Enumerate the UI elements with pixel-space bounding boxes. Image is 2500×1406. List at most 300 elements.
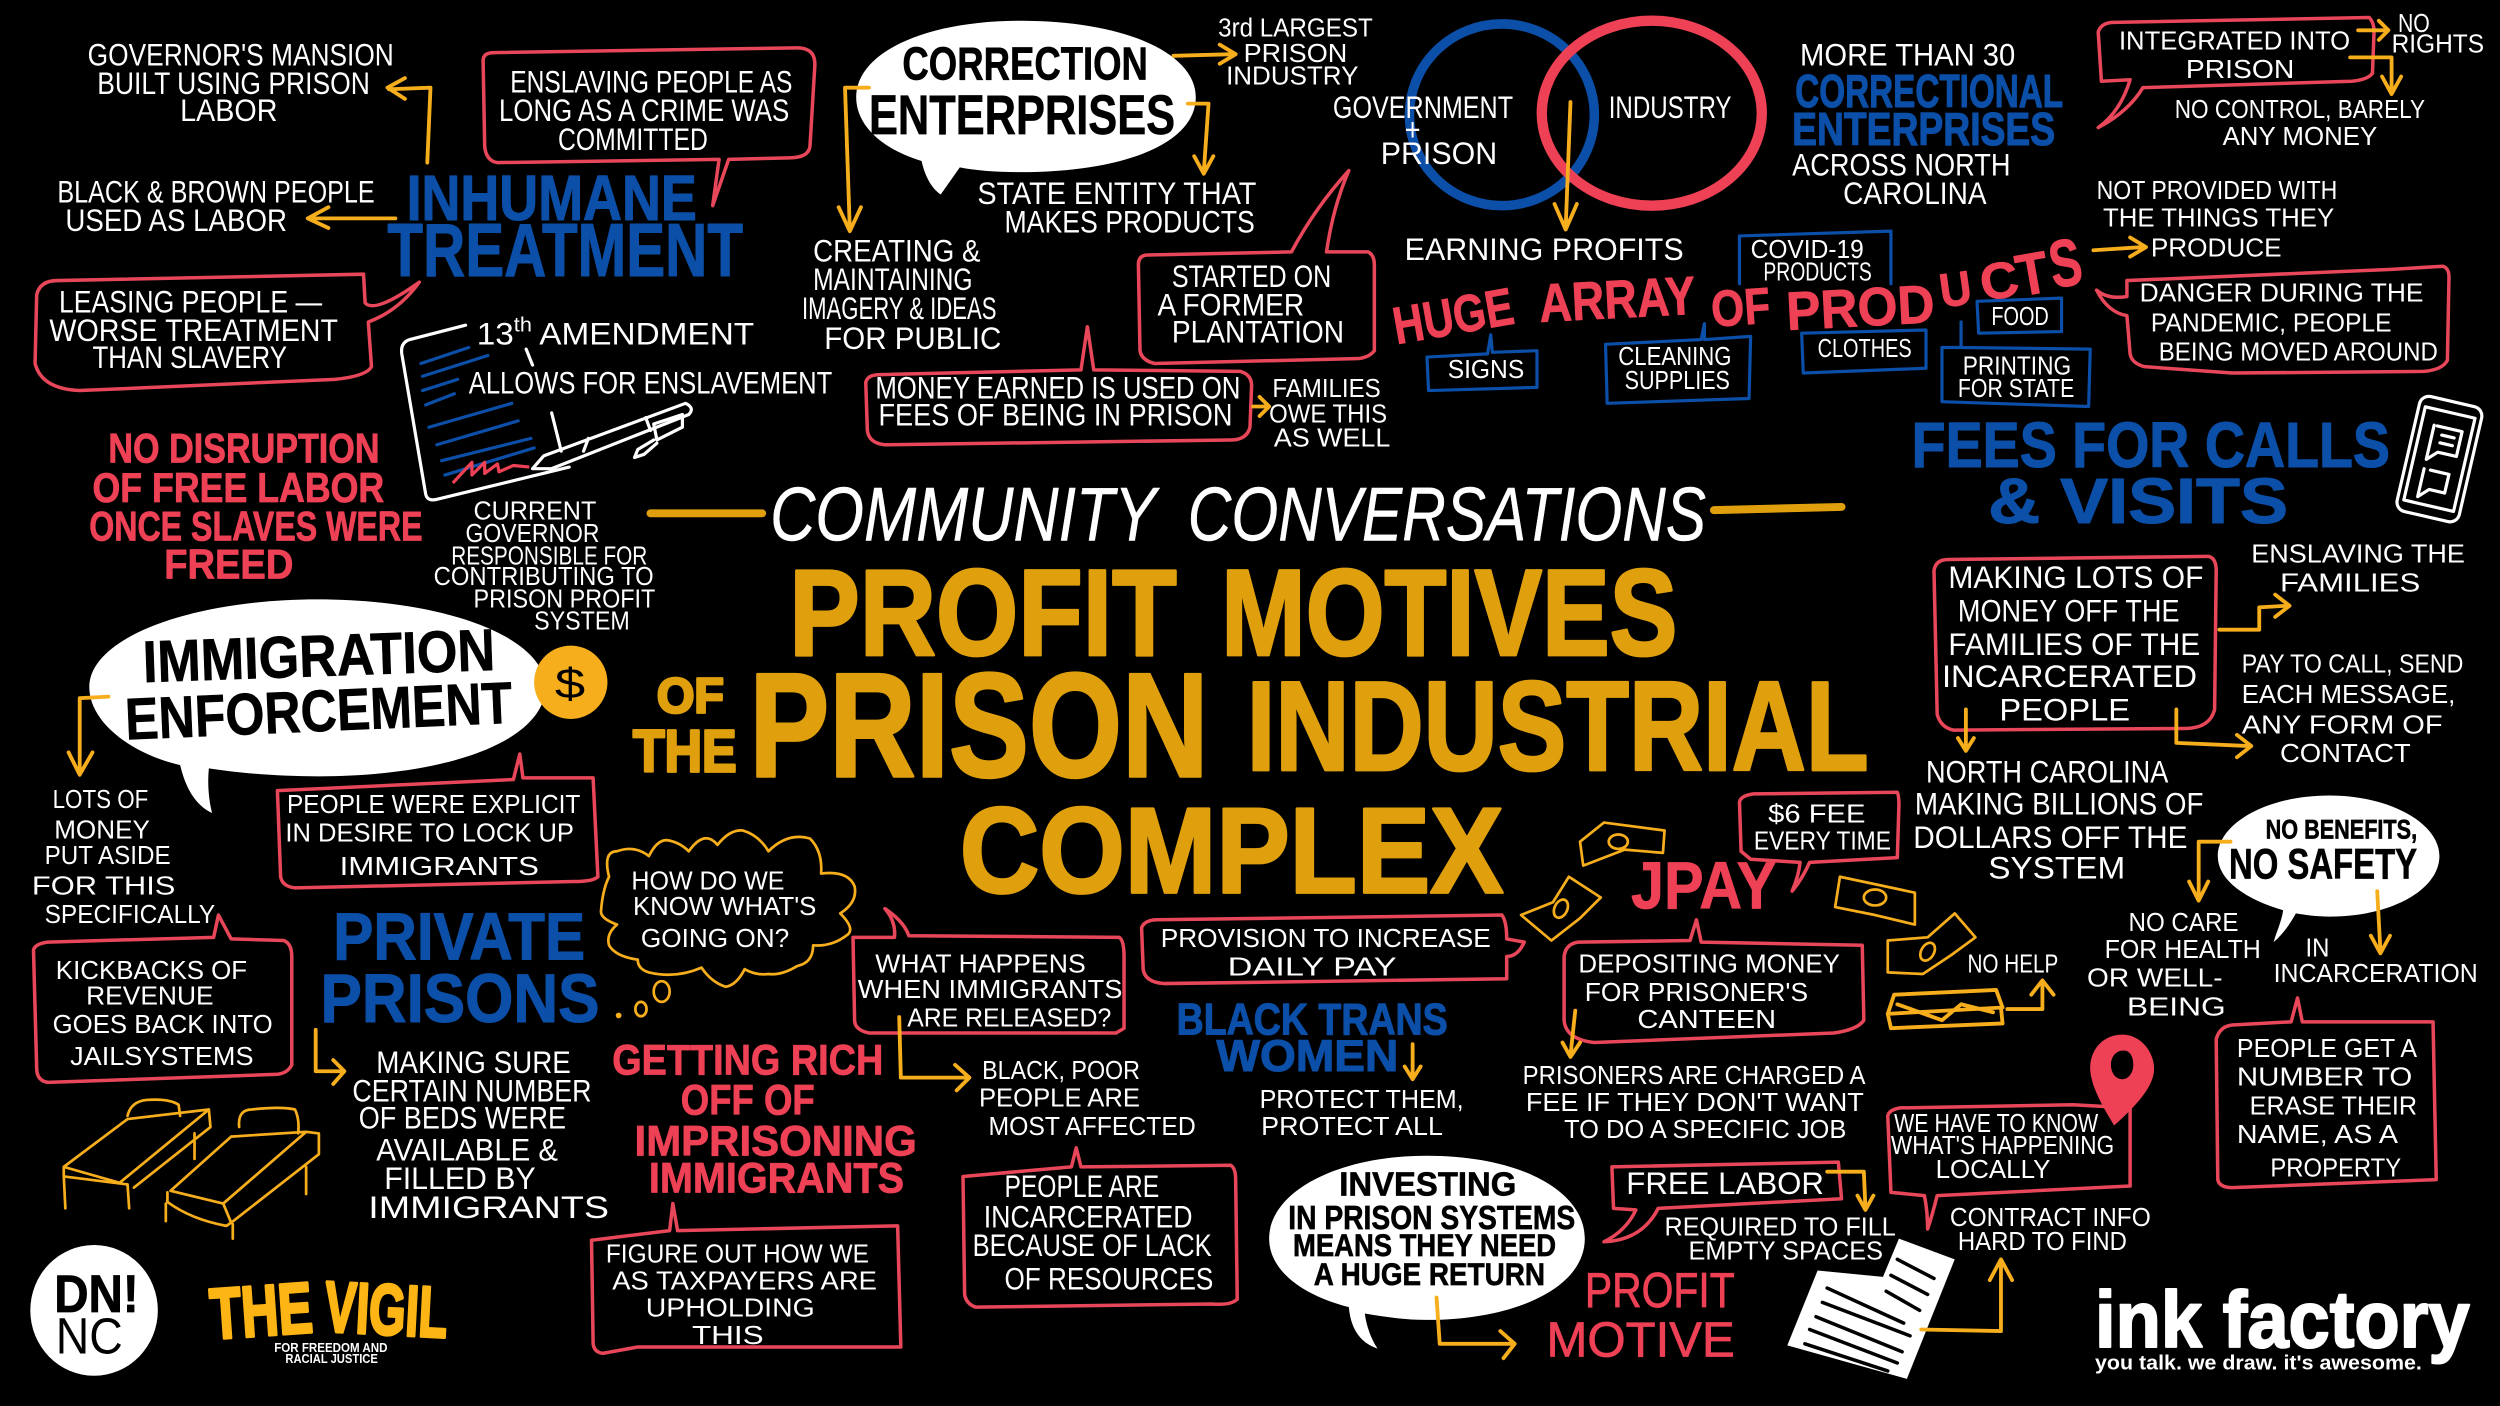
callout: started on a plantation <box>1138 171 1374 363</box>
venn diagram: government and industry: GOVERNMENT <box>1333 89 1513 125</box>
logo: the vigil <box>208 1267 450 1366</box>
speech bubble: investing in prison systems <box>1269 1156 1585 1349</box>
text: not provided with: NOT PROVIDED WITH <box>2097 177 2337 205</box>
label: cleaning supplies <box>1606 324 1751 403</box>
text: 3rd largest prison industry: PRISON <box>1244 40 1347 68</box>
heading: fees for calls and visits <box>1912 409 2390 537</box>
callout: free labor <box>1604 1162 1842 1242</box>
text: lots of money <box>32 786 215 929</box>
callout: people were explicit <box>277 754 598 888</box>
title: profit motives of the prison industrial complex: MOTIVES <box>1221 545 1677 682</box>
text: pay to call: EACH MESSAGE, <box>2242 681 2455 709</box>
arrow: private prisons to making sure <box>316 1030 344 1084</box>
callout: people get a number: NUMBER TO <box>2237 1064 2412 1092</box>
subtitle: community conversations: CONVERSATIONS <box>1188 472 1706 557</box>
text: 13th amendment: th <box>514 314 532 337</box>
logo: democracy now nc <box>30 1245 158 1376</box>
callout: kickbacks of revenue: JAILSYSTEMS <box>70 1043 254 1071</box>
callout: we have to know locally: WE HAVE TO KNOW <box>1894 1110 2098 1138</box>
text: no care for health: FOR HEALTH <box>2105 936 2261 964</box>
text: governor's mansion: BUILT USING PRISON <box>97 65 370 101</box>
callout: figure out how we: AS TAXPAYERS ARE <box>612 1268 877 1296</box>
label: printing for state <box>1942 322 2090 406</box>
thought bubble: how do we know: GOING ON? <box>641 925 789 953</box>
venn diagram: government and industry: INDUSTRY <box>1609 89 1732 125</box>
arrow: to lots of money <box>69 697 108 775</box>
text: lots of money: LOTS OF <box>53 786 148 814</box>
callout: people get a number <box>2216 998 2436 1188</box>
callout: kickbacks of revenue: REVENUE <box>86 982 214 1010</box>
text: making lots of money: INCARCERATED <box>1942 658 2197 694</box>
text: no control: NO CONTROL, BARELY <box>2175 96 2425 124</box>
heading: no disruption of free labor: OF FREE LABOR <box>92 464 384 511</box>
callout: started on a plantation: A FORMER <box>1158 287 1304 323</box>
speech bubble: no benefits no safety: NO SAFETY <box>2229 840 2417 888</box>
callout: provision to increase daily pay: PROVISION TO INCREASE <box>1161 925 1491 953</box>
text: state entity: MAKES PRODUCTS <box>1004 204 1255 240</box>
callout: money earned <box>866 327 1252 445</box>
logo: ink factory: you talk. we draw. it's awesome. <box>2095 1351 2422 1374</box>
text: north carolina making billions <box>1913 754 2203 885</box>
heading: huge array of products: ARRAY <box>1538 266 1697 334</box>
text: families owe this: AS WELL <box>1274 424 1390 452</box>
text: pay to call: PAY TO CALL, SEND <box>2242 651 2463 679</box>
text: in incarceration: IN <box>2305 934 2329 962</box>
label: signs <box>1427 335 1537 391</box>
callout: six dollar fee: EVERY TIME <box>1754 828 1891 856</box>
text: not provided with <box>2097 177 2337 263</box>
callout: money earned: MONEY EARNED IS USED ON <box>875 370 1240 406</box>
callout: danger during pandemic <box>2097 266 2449 373</box>
callout: people were explicit: IN DESIRE TO LOCK UP <box>285 820 574 848</box>
callout: danger during pandemic: BEING MOVED AROUND <box>2159 338 2438 366</box>
logo: democracy now nc: DN! <box>54 1265 139 1324</box>
callout: figure out how we: FIGURE OUT HOW WE <box>606 1241 869 1269</box>
heading: huge array of products: T <box>2011 240 2054 309</box>
thought bubble dots <box>616 981 670 1018</box>
thought bubble: how do we know: KNOW WHAT'S <box>633 893 816 921</box>
heading: profit motive <box>1547 1263 1735 1368</box>
heading: profit motive: MOTIVE <box>1547 1313 1735 1368</box>
callout: leasing people <box>35 274 419 391</box>
callout: integrated into prison: INTEGRATED INTO <box>2119 27 2350 55</box>
heading: jpay: JPAY <box>1631 849 1776 924</box>
heading: fees for calls and visits: FEES FOR CALLS <box>1912 409 2390 481</box>
speech bubble: immigration enforcement: IMMIGRATION <box>142 618 496 695</box>
arrow: to in incarceration <box>2371 891 2390 953</box>
label: food: FOOD <box>1991 303 2049 331</box>
logo: the vigil: VIGIL <box>323 1267 450 1353</box>
logo: the vigil: RACIAL JUSTICE <box>285 1351 378 1366</box>
speech bubble: immigration enforcement: ENFORCEMENT <box>124 671 514 753</box>
arrow: document to contract info <box>1921 1259 2012 1331</box>
text: creating and maintaining: MAINTAINING <box>813 261 973 297</box>
callout: enslaving people: LONG AS A CRIME WAS <box>499 92 789 128</box>
text: black poor people: BLACK, POOR <box>982 1057 1140 1085</box>
text: pay to call <box>2242 651 2463 768</box>
label: clothes: CLOTHES <box>1818 335 1912 363</box>
callout: danger during pandemic: PANDEMIC, PEOPLE <box>2151 310 2392 338</box>
callout: free labor: FREE LABOR <box>1626 1165 1824 1201</box>
heading: huge array of products: PROD <box>1785 274 1936 342</box>
arrow: stack to no help <box>2007 980 2054 1009</box>
callout: what happens when immigrants released <box>853 909 1124 1033</box>
venn diagram: government and industry: + <box>1405 111 1421 147</box>
text: making sure certain number of beds: CERTAIN NUMBER <box>352 1073 592 1109</box>
arrow: products to produce <box>2093 238 2146 257</box>
text: lots of money: FOR THIS <box>32 872 175 900</box>
title: profit motives of the prison industrial complex: OF <box>657 669 724 724</box>
callout: depositing money: DEPOSITING MONEY <box>1578 950 1840 978</box>
text: required to fill: EMPTY SPACES <box>1688 1237 1883 1265</box>
heading: no disruption of free labor: ONCE SLAVES WERE <box>89 502 423 549</box>
callout: provision to increase daily pay: DAILY PAY <box>1228 954 1397 982</box>
callout: money earned: FEES OF BEING IN PRISON <box>879 397 1232 433</box>
arrow: to state entity <box>1188 104 1213 174</box>
logo: the vigil: FOR FREEDOM AND <box>274 1340 387 1355</box>
text: north carolina making billions: MAKING BILLIONS OF <box>1915 786 2203 822</box>
text: more than 30 correctional enterprises: ACROSS NORTH <box>1792 146 2011 182</box>
logo: the vigil: THE <box>208 1268 315 1355</box>
text: in incarceration: INCARCERATION <box>2274 960 2478 988</box>
speech bubble: correction enterprises: CORRECTION <box>902 38 1148 90</box>
text: 3rd largest prison industry: 3rd LARGEST <box>1218 15 1373 43</box>
callout: leasing people: WORSE TREATMENT <box>49 312 338 348</box>
text: more than 30 correctional enterprises <box>1792 36 2063 211</box>
text: prisoners are charged: FEE IF THEY DON'T WANT <box>1526 1089 1864 1117</box>
heading: inhumane treatment <box>387 162 743 292</box>
callout: people are incarcerated: BECAUSE OF LACK <box>973 1227 1212 1263</box>
callout: danger during pandemic: DANGER DURING THE <box>2140 279 2423 307</box>
label: signs: SIGNS <box>1448 356 1524 384</box>
text: state entity: STATE ENTITY THAT <box>977 175 1256 211</box>
callout: leasing people: THAN SLAVERY <box>92 339 287 375</box>
heading: getting rich off of imprisoning immigrants: IMMIGRANTS <box>649 1154 904 1202</box>
text: enslaving the families: FAMILIES <box>2280 569 2420 597</box>
text: prisoners are charged <box>1523 1062 1865 1144</box>
text: enslaving the families: ENSLAVING THE <box>2251 541 2465 569</box>
callout: people are incarcerated: INCARCERATED <box>984 1198 1193 1234</box>
callout: people get a number: ERASE THEIR <box>2250 1092 2417 1120</box>
text: more than 30 correctional enterprises: CORRECTIONAL <box>1795 65 2063 117</box>
heading: private prisons: PRISONS <box>320 960 599 1037</box>
subtitle: community conversations <box>770 472 1706 557</box>
text: no care for health: OR WELL- <box>2087 965 2223 993</box>
heading: no disruption of free labor: NO DISRUPTION <box>108 424 379 471</box>
text: not provided with: THE THINGS THEY <box>2103 204 2334 232</box>
callout: we have to know locally: LOCALLY <box>1936 1156 2050 1184</box>
text: earning profits: EARNING PROFITS <box>1405 231 1684 267</box>
text: making sure certain number of beds: AVAILABLE & <box>376 1132 558 1168</box>
text: in incarceration <box>2274 934 2478 988</box>
callout: figure out how we: THIS <box>692 1322 764 1350</box>
callout: figure out how we: UPHOLDING <box>646 1295 815 1323</box>
heading: inhumane treatment: INHUMANE <box>407 162 697 234</box>
callout: people get a number: PROPERTY <box>2270 1154 2401 1182</box>
callout: integrated into prison: PRISON <box>2186 56 2294 84</box>
arrow: to profit motive <box>1437 1298 1515 1358</box>
text: pay to call: ANY FORM OF <box>2242 711 2443 739</box>
callout: kickbacks of revenue: GOES BACK INTO <box>53 1011 273 1039</box>
arrow: inhumane treatment to governor's mansion <box>387 78 430 163</box>
text: black poor people <box>979 1057 1196 1141</box>
label: food <box>1977 298 2062 333</box>
text: no help: NO HELP <box>1967 950 2058 978</box>
title: profit motives of the prison industrial complex: PRISON <box>749 643 1209 808</box>
heading: huge array of products: C <box>1975 249 2023 312</box>
arrow: to 3rd largest <box>1173 45 1236 64</box>
heading: huge array of products: U <box>1936 262 1975 319</box>
text: black and brown people <box>57 173 375 238</box>
title: profit motives of the prison industrial complex: COMPLEX <box>960 783 1504 919</box>
text: families owe this: FAMILIES <box>1272 375 1381 403</box>
callout: people are incarcerated <box>963 1148 1237 1307</box>
text: prisoners are charged: TO DO A SPECIFIC JOB <box>1564 1116 1846 1144</box>
text: pay to call: CONTACT <box>2280 740 2411 768</box>
arrow: to pay to call <box>2176 709 2251 757</box>
speech bubble: correction enterprises: ENTERPRISES <box>869 83 1175 146</box>
text: making sure certain number of beds: OF BEDS WERE <box>359 1100 566 1136</box>
callout: started on a plantation: PLANTATION <box>1172 314 1344 350</box>
title: profit motives of the prison industrial complex: PROFIT <box>789 545 1177 682</box>
arrow: to no control <box>2350 57 2401 94</box>
text: protect them protect all: PROTECT ALL <box>1261 1113 1443 1141</box>
callout: we have to know locally <box>1888 1105 2130 1229</box>
heading: huge array of products: OF <box>1709 277 1772 338</box>
text: making sure certain number of beds: FILLED BY <box>384 1160 536 1196</box>
logo: ink factory: ink factory <box>2095 1275 2470 1364</box>
text: more than 30 correctional enterprises: ENTERPRISES <box>1792 103 2055 155</box>
text: governor's mansion: LABOR <box>180 92 277 128</box>
text: not provided with: PRODUCE <box>2151 235 2282 263</box>
callout: enslaving people: ENSLAVING PEOPLE AS <box>510 63 792 99</box>
text: families owe this: OWE THIS <box>1269 400 1387 428</box>
text: making sure certain number of beds: MAKING SURE <box>376 1044 571 1080</box>
text: contract info hard to find: HARD TO FIND <box>1958 1228 2127 1256</box>
arrow: to prisoners are charged <box>1562 1011 1580 1057</box>
callout: kickbacks of revenue: KICKBACKS OF <box>56 957 247 985</box>
label: printing for state: FOR STATE <box>1958 375 2074 403</box>
label: cleaning supplies: CLEANING <box>1618 343 1732 371</box>
text: no rights <box>2392 10 2484 59</box>
callout: enslaving people <box>483 48 815 206</box>
arrow: to no rights <box>2358 21 2388 40</box>
heading: profit motive: PROFIT <box>1585 1263 1735 1318</box>
title line right <box>1714 507 1842 510</box>
text: required to fill: REQUIRED TO FILL <box>1665 1213 1896 1241</box>
venn diagram: government and industry <box>1333 21 1762 206</box>
text: lots of money: PUT ASIDE <box>45 842 171 870</box>
callout: people were explicit: PEOPLE WERE EXPLICIT <box>287 791 580 819</box>
text: current governor: CONTRIBUTING TO <box>434 563 654 591</box>
heading: inhumane treatment: TREATMENT <box>387 208 743 292</box>
speech bubble: no benefits no safety: NO BENEFITS, <box>2266 814 2417 844</box>
speech bubble: no benefits no safety <box>2218 795 2439 942</box>
heading: huge array of products: S <box>2043 224 2088 303</box>
callout: six dollar fee: $6 FEE <box>1768 801 1865 829</box>
text: making sure certain number of beds <box>352 1044 609 1225</box>
text: enslaving the families <box>2251 541 2465 597</box>
label: printing for state: PRINTING <box>1963 353 2071 381</box>
speech bubble: investing in prison systems: INVESTING <box>1339 1167 1516 1204</box>
text: current governor: CURRENT <box>474 498 596 526</box>
heading: black trans women <box>1177 996 1448 1081</box>
callout: leasing people: LEASING PEOPLE — <box>59 283 322 319</box>
text: no care for health: NO CARE <box>2129 909 2239 937</box>
text: no control: ANY MONEY <box>2223 123 2377 151</box>
heading: getting rich off of imprisoning immigrants: OFF OF <box>681 1076 815 1124</box>
text: governor's mansion <box>88 36 394 128</box>
text: black poor people: PEOPLE ARE <box>979 1084 1140 1112</box>
heading: private prisons <box>320 900 599 1037</box>
icon: phone <box>2395 394 2484 524</box>
text: current governor: SYSTEM <box>534 608 630 636</box>
icon: dollar coin: $ <box>555 660 585 708</box>
text: creating and maintaining <box>802 232 1001 356</box>
text: no rights: RIGHTS <box>2392 31 2484 59</box>
text: north carolina making billions: NORTH CAROLINA <box>1926 754 2169 790</box>
speech bubble: investing in prison systems: IN PRISON SYSTEMS <box>1288 1200 1575 1237</box>
title line left <box>651 511 762 516</box>
icon: dollar coin <box>534 646 607 719</box>
text: 13th amendment <box>469 314 832 401</box>
callout: enslaving people: COMMITTED <box>558 121 708 157</box>
text: north carolina making billions: SYSTEM <box>1988 849 2125 885</box>
title: profit motives of the prison industrial complex: INDUSTRIAL <box>1247 656 1869 798</box>
text: making sure certain number of beds: IMMIGRANTS <box>368 1189 609 1225</box>
callout: what happens when immigrants released: ARE RELEASED? <box>907 1005 1111 1033</box>
text: making lots of money: FAMILIES OF THE <box>1948 626 2200 662</box>
subtitle: community conversations: COMMUNITY <box>770 472 1160 557</box>
text: 13th amendment: AMENDMENT <box>532 315 754 351</box>
thought bubble: how do we know <box>601 830 855 987</box>
heading: black trans women: WOMEN <box>1217 1032 1398 1081</box>
thought bubble: how do we know: HOW DO WE <box>631 868 784 896</box>
arrow: to enslaving the families <box>2219 595 2290 630</box>
callout: people were explicit: IMMIGRANTS <box>340 853 539 881</box>
callout: depositing money: FOR PRISONER'S <box>1585 979 1808 1007</box>
text: more than 30 correctional enterprises: CAROLINA <box>1843 175 1987 211</box>
text: current governor <box>434 498 655 636</box>
text: no control <box>2175 96 2425 151</box>
text: current governor: PRISON PROFIT <box>474 585 655 613</box>
text: black and brown people: BLACK & BROWN PEOPLE <box>57 173 375 209</box>
text: lots of money: SPECIFICALLY <box>45 901 215 929</box>
callout: figure out how we <box>592 1204 901 1353</box>
arrow: to black and brown people <box>308 207 395 228</box>
text: creating and maintaining: IMAGERY & IDEAS <box>802 290 996 326</box>
text: contract info hard to find <box>1950 1204 2151 1256</box>
arrow: to north carolina <box>1958 709 1974 751</box>
callout: depositing money: CANTEEN <box>1637 1006 1776 1034</box>
callout: six dollar fee <box>1739 792 1899 891</box>
text: no care for health <box>2087 909 2261 1021</box>
text: lots of money: MONEY <box>54 817 150 844</box>
text: black poor people: MOST AFFECTED <box>989 1113 1196 1141</box>
heading: no disruption of free labor: FREED <box>164 541 293 588</box>
callout: people are incarcerated: OF RESOURCES <box>1004 1261 1213 1297</box>
text: state entity <box>977 175 1256 240</box>
text: families owe this <box>1269 375 1390 452</box>
text: making lots of money: MAKING LOTS OF <box>1948 559 2203 595</box>
label: clothes <box>1802 330 1926 373</box>
text: current governor: RESPONSIBLE FOR <box>451 542 647 570</box>
callout: people get a number: NAME, AS A <box>2237 1121 2398 1149</box>
callout: started on a plantation: STARTED ON <box>1172 258 1331 294</box>
text: creating and maintaining: CREATING & <box>813 232 981 268</box>
arrow: to protect them <box>1405 1044 1421 1079</box>
icon: contract document <box>1787 1239 1955 1379</box>
arrow: venn to earning profits <box>1555 102 1577 230</box>
icon: location pin <box>2090 1035 2154 1125</box>
icon: document and pen <box>402 325 691 500</box>
text: 3rd largest prison industry <box>1218 15 1373 90</box>
callout: depositing money <box>1564 920 1864 1043</box>
text: protect them protect all: PROTECT THEM, <box>1260 1086 1464 1114</box>
text: governor's mansion: GOVERNOR'S MANSION <box>88 36 394 72</box>
text: protect them protect all <box>1260 1086 1464 1141</box>
arrow: to no care <box>2189 842 2231 901</box>
heading: no disruption of free labor <box>89 424 423 588</box>
logo: democracy now nc: NC <box>56 1307 123 1364</box>
speech bubble: immigration enforcement <box>89 599 545 813</box>
callout: provision to increase daily pay <box>1142 915 1524 984</box>
arrow: to black poor people <box>899 1017 969 1090</box>
heading: fees for calls and visits: & VISITS <box>1988 465 2288 537</box>
heading: getting rich off of imprisoning immigrants <box>612 1036 917 1202</box>
heading: huge array of products: HUGE <box>1389 277 1518 356</box>
text: 3rd largest prison industry: INDUSTRY <box>1226 62 1358 90</box>
heading: black trans women: BLACK TRANS <box>1177 996 1448 1045</box>
speech bubble: investing in prison systems: A HUGE RETURN <box>1314 1256 1545 1292</box>
callout: integrated into prison <box>2098 18 2374 128</box>
title: profit motives of the prison industrial complex <box>633 545 1869 919</box>
text: current governor: GOVERNOR <box>466 520 599 548</box>
text: no rights: NO <box>2398 10 2430 38</box>
text: making lots of money <box>1934 556 2216 730</box>
heading: getting rich off of imprisoning immigrants: GETTING RICH <box>612 1036 883 1084</box>
text: 13th amendment: ALLOWS FOR ENSLAVEMENT <box>469 365 832 401</box>
text: making lots of money: MONEY OFF THE <box>1958 593 2180 629</box>
arrow: to families owe <box>1253 397 1269 416</box>
text: required to fill <box>1665 1213 1896 1265</box>
label: covid-19 products <box>1739 231 1891 287</box>
venn diagram: government and industry: PRISON <box>1381 135 1497 171</box>
text: black and brown people: USED AS LABOR <box>65 202 287 238</box>
heading: private prisons: PRIVATE <box>333 900 585 975</box>
callout: what happens when immigrants released: WHAT HAPPENS <box>875 950 1086 978</box>
text: prisoners are charged: PRISONERS ARE CHARGED A <box>1523 1062 1865 1090</box>
text: more than 30 correctional enterprises: MORE THAN 30 <box>1800 36 2015 72</box>
callout: kickbacks of revenue <box>33 915 292 1082</box>
heading: getting rich off of imprisoning immigrants: IMPRISONING <box>635 1118 917 1166</box>
arrow: to creating imagery <box>839 88 869 231</box>
text: 13th amendment: 13 <box>477 315 512 351</box>
text: no care for health: BEING <box>2127 993 2226 1021</box>
speech bubble: correction enterprises <box>856 21 1196 194</box>
title: profit motives of the prison industrial complex: THE <box>633 720 737 785</box>
callout: what happens when immigrants released: WHEN IMMIGRANTS <box>858 976 1122 1004</box>
heading: huge array of products <box>1389 224 2088 356</box>
text: creating and maintaining: FOR PUBLIC <box>824 320 1001 356</box>
icon: stack of bills <box>1888 990 2003 1028</box>
label: cleaning supplies: SUPPLIES <box>1625 367 1730 395</box>
callout: we have to know locally: WHAT'S HAPPENING <box>1891 1132 2114 1160</box>
label: covid-19 products: PRODUCTS <box>1763 259 1872 287</box>
label: covid-19 products: COVID-19 <box>1751 236 1864 264</box>
icon: money bills <box>1521 823 1975 974</box>
callout: people get a number: PEOPLE GET A <box>2237 1035 2417 1063</box>
